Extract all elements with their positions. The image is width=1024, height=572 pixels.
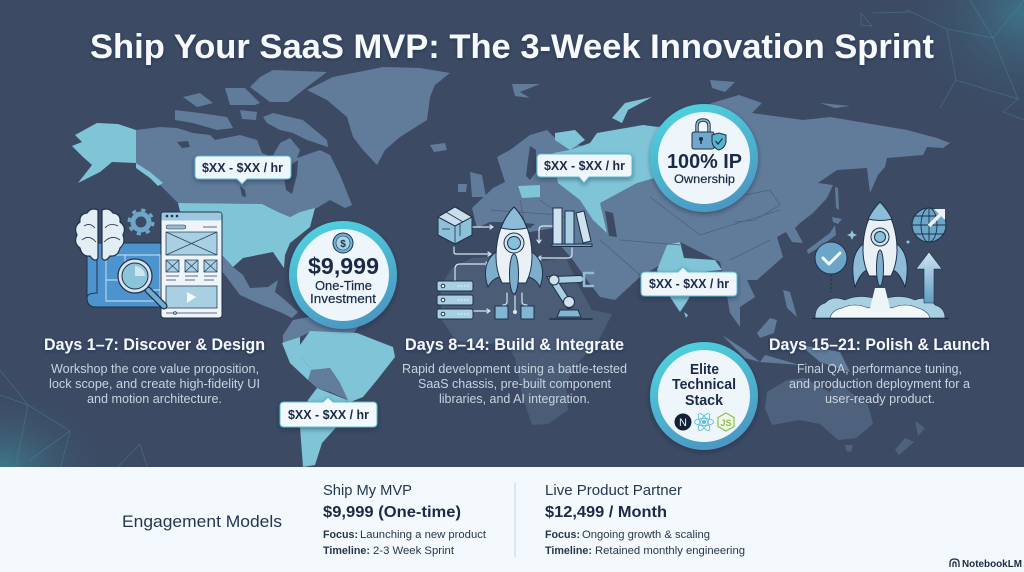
plan: Live Product Partner: Live Product Partner xyxy=(545,483,682,499)
price tag: South America xyxy=(280,397,377,427)
text: step 1 description: lock scope, and create high-fidelity UI xyxy=(49,377,260,391)
robot arm xyxy=(549,273,593,319)
map: Greenland and Iceland xyxy=(307,67,450,165)
server rack xyxy=(437,281,473,319)
icon: Node.js: JS xyxy=(720,418,732,428)
text: step 3 description: and production deployment for a xyxy=(789,377,970,391)
map: Brazil and neighbours (highlight) xyxy=(300,331,395,403)
map: Hudson and James Bay xyxy=(177,141,298,197)
map: Japan, Britain, islands xyxy=(458,80,850,372)
clouds xyxy=(815,296,945,318)
text: step 2 description: SaaS chassis, pre-built component xyxy=(418,377,612,391)
icon: padlock with shield xyxy=(692,120,726,150)
map: Australia and New Zealand xyxy=(765,378,925,455)
connector arrows xyxy=(454,225,572,314)
check circle xyxy=(815,242,847,292)
text: step 1 description: and motion architecture. xyxy=(87,392,222,406)
icon: dollar coin: $ xyxy=(340,239,346,250)
price tag: India: $XX - $XX / hr xyxy=(649,277,729,291)
magnifying glass xyxy=(118,259,164,306)
badge: $9,999 investment: $9,999 xyxy=(308,253,379,279)
exhaust flame xyxy=(869,288,891,312)
up arrow xyxy=(916,252,942,303)
rocket xyxy=(485,207,543,294)
gear xyxy=(129,210,153,234)
badge: Elite Technical Stack xyxy=(650,342,758,450)
badge: 100% IP ownership: Ownership xyxy=(674,172,735,186)
cube xyxy=(438,207,472,244)
corner glow: top right xyxy=(880,0,1024,130)
heading: step 1: Days 1–7: Discover & Design xyxy=(44,336,265,354)
map: Peru (highlight) xyxy=(282,337,313,380)
map: Alaska (highlight) xyxy=(72,123,163,186)
badge: $9,999 investment: Investment xyxy=(310,291,376,306)
logo: NotebookLM: NotebookLM xyxy=(962,558,1022,570)
rocket xyxy=(853,202,907,287)
heading: engagement models: Engagement Models xyxy=(122,513,282,531)
badge: Elite Technical Stack: Technical xyxy=(672,377,736,393)
map: Bolivia xyxy=(308,368,348,400)
badge: 100% IP ownership xyxy=(650,104,758,212)
map: Africa xyxy=(440,256,612,425)
plan: Ship My MVP: $9,999 (One-time) xyxy=(323,504,461,521)
icon: build and integrate illustration xyxy=(437,207,593,319)
plan: Live Product Partner: Retained monthly engineering xyxy=(595,545,745,557)
corner glow: bottom left xyxy=(0,370,130,470)
map: Mexico and Central America xyxy=(200,247,298,318)
text: step 2 description: libraries, and AI integration. xyxy=(439,392,590,406)
text: step 2 description: Rapid development using a battle-tested xyxy=(402,362,627,376)
heading: step 2: Days 8–14: Build & Integrate xyxy=(405,336,624,354)
ground line xyxy=(812,318,949,320)
brain xyxy=(76,209,124,260)
text: step 1 description: Workshop the core value proposition, xyxy=(51,362,259,376)
price tag: South America: $XX - $XX / hr xyxy=(288,408,369,422)
text: step 3 description: user-ready product. xyxy=(825,392,935,406)
plan: Live Product Partner: Focus: xyxy=(545,529,580,541)
map: border lines xyxy=(490,190,780,275)
price tag: India xyxy=(641,267,737,296)
globe with arrow xyxy=(912,208,946,242)
plan: Ship My MVP: Timeline: xyxy=(323,545,370,557)
plan: Ship My MVP: Ship My MVP xyxy=(323,483,412,499)
heading: step 3: Days 15–21: Polish & Launch xyxy=(769,336,990,354)
badge: $9,999 investment xyxy=(289,221,397,329)
icon: polish and launch illustration xyxy=(812,202,949,318)
text: step 1 description xyxy=(49,362,260,406)
support blocks xyxy=(495,306,534,319)
map: Caspian Sea xyxy=(513,146,617,237)
map: northern South America xyxy=(283,315,360,344)
sparkles xyxy=(847,230,910,244)
map: Arctic islands xyxy=(175,70,328,147)
plan: Live Product Partner: Timeline: xyxy=(545,545,592,557)
icon: React xyxy=(694,412,714,432)
wireframe window xyxy=(161,212,222,318)
badge: Elite Technical Stack: Stack xyxy=(685,393,724,409)
map: Russia (highlight) xyxy=(518,97,665,233)
plan: Live Product Partner: Ongoing growth & scaling xyxy=(582,529,710,541)
icon: Next.js: N xyxy=(679,417,687,429)
map: India (highlight) xyxy=(657,242,722,318)
plan: Ship My MVP: 2-3 Week Sprint xyxy=(373,545,454,557)
book shelf xyxy=(552,208,592,246)
price tag: Eastern Europe xyxy=(537,154,632,183)
blueprint sheet xyxy=(87,243,165,307)
price tag: North America xyxy=(195,156,291,184)
map: Argentina and Chile (highlight) xyxy=(300,388,347,467)
plan: Ship My MVP: Launching a new product xyxy=(360,529,486,541)
text: step 2 description xyxy=(402,362,627,406)
title: Ship Your SaaS MVP: The 3-Week Innovation Sprint xyxy=(90,28,934,66)
panel: engagement models footer xyxy=(0,467,1024,572)
price tag: Eastern Europe: $XX - $XX / hr xyxy=(544,159,625,173)
icon: discover and design illustration xyxy=(76,209,222,318)
badge: 100% IP ownership: 100% IP xyxy=(667,151,742,173)
world map xyxy=(72,67,950,467)
map: Canada xyxy=(136,127,352,217)
badge: $9,999 investment: One-Time xyxy=(315,278,372,293)
map: Eurasia xyxy=(472,95,950,327)
plan: Live Product Partner: $12,499 / Month xyxy=(545,504,667,521)
text: step 3 description: Final QA, performance tuning, xyxy=(797,362,962,376)
badge: Elite Technical Stack: Elite xyxy=(690,362,719,378)
text: step 3 description xyxy=(789,362,970,406)
plan: Ship My MVP: Focus: xyxy=(323,529,358,541)
plan: Ship My MVP xyxy=(323,483,486,557)
map: USA (highlight) xyxy=(178,203,315,268)
plan: Live Product Partner xyxy=(545,483,745,557)
price tag: North America: $XX - $XX / hr xyxy=(202,161,283,175)
